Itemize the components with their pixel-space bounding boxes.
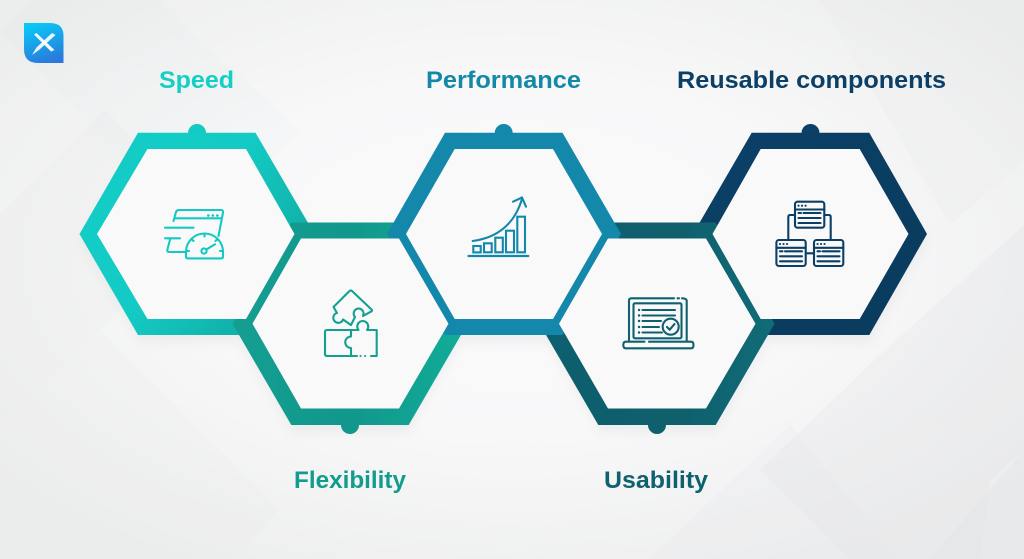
ring: reusable components hexagon (693, 124, 927, 335)
ring: usability hexagon (540, 222, 774, 434)
heading: Reusable components: Reusable components (677, 67, 946, 94)
white hexagon faces (97, 149, 908, 408)
heading: Usability: Usability (604, 467, 709, 494)
icon: browser with speedometer (165, 210, 223, 258)
heading: Flexibility: Flexibility (294, 467, 407, 494)
heading: Performance: Performance (426, 67, 581, 94)
hexagon shadows (80, 142, 928, 433)
ring: performance hexagon (387, 124, 621, 335)
ring: speed hexagon (80, 124, 314, 335)
icon: growth chart (468, 198, 528, 256)
ring: flexibility hexagon (232, 222, 468, 434)
heading: Speed: Speed (159, 67, 234, 94)
icon: puzzle pieces (325, 290, 377, 356)
logo (24, 23, 64, 63)
icon: connected windows (776, 202, 843, 266)
icon: laptop with checklist (623, 298, 694, 348)
